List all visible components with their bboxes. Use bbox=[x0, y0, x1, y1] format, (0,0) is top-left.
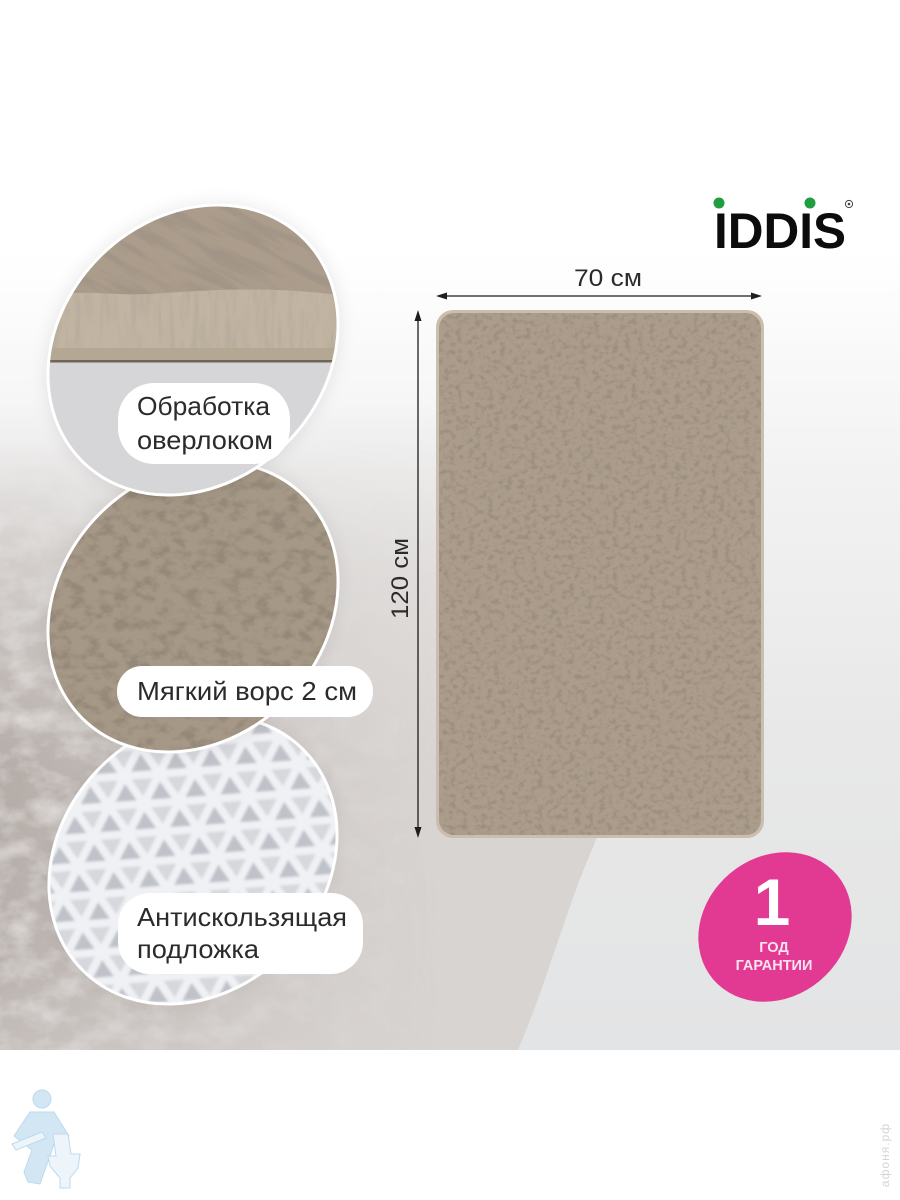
blob outline bbox=[0, 657, 396, 1063]
label pill: оверлоком bbox=[137, 425, 273, 455]
watermark: site name: афоня.рф bbox=[878, 1123, 892, 1187]
plumber body bbox=[14, 1112, 69, 1184]
panel: soft pile detail bbox=[46, 467, 373, 754]
label pill: Обработка bbox=[137, 391, 271, 421]
panel: rug product photo bbox=[436, 310, 764, 838]
label pill: подложка bbox=[137, 934, 260, 964]
label pill bbox=[118, 383, 290, 464]
badge text: ГАРАНТИИ bbox=[736, 958, 812, 974]
blob shadow bbox=[0, 146, 397, 554]
badge shape bbox=[668, 821, 882, 1033]
label pill bbox=[117, 666, 373, 717]
height dimension bbox=[387, 310, 422, 838]
photo: overlock edge bbox=[50, 206, 336, 494]
logo: IDDIS bbox=[714, 198, 853, 259]
blob shadow bbox=[0, 657, 396, 1063]
arrow: width bbox=[436, 292, 762, 300]
badge text: ГОД bbox=[759, 940, 789, 956]
icon: registered mark bbox=[845, 200, 853, 208]
panel: overlock detail bbox=[44, 201, 342, 496]
width dimension bbox=[436, 265, 762, 300]
label: 120 cm: 120 см bbox=[387, 538, 414, 619]
blob shadow bbox=[0, 403, 397, 811]
background: fluffy rug on floor bbox=[0, 450, 596, 1050]
label: 70 cm: 70 см bbox=[574, 265, 642, 292]
panel: anti-slip backing detail bbox=[48, 722, 363, 1006]
label pill: Антискользящая bbox=[137, 902, 347, 932]
icon: plumber watermark bbox=[12, 1090, 80, 1188]
label pill bbox=[118, 893, 363, 974]
badge number: 1 bbox=[754, 865, 790, 939]
badge: 1 year warranty bbox=[668, 821, 882, 1033]
blob outline bbox=[0, 403, 397, 811]
logo text: IDDIS bbox=[714, 203, 846, 259]
photo: triangle pattern bbox=[50, 724, 336, 1002]
toilet bbox=[48, 1134, 80, 1188]
plumber head bbox=[33, 1090, 51, 1108]
icon: green dots bbox=[714, 198, 816, 208]
arrow: height bbox=[414, 310, 422, 838]
label pill: Мягкий ворс 2 см bbox=[137, 676, 357, 706]
blob outline bbox=[0, 146, 397, 554]
plumber wrench bbox=[12, 1132, 46, 1150]
photo: pile texture bbox=[50, 469, 336, 750]
